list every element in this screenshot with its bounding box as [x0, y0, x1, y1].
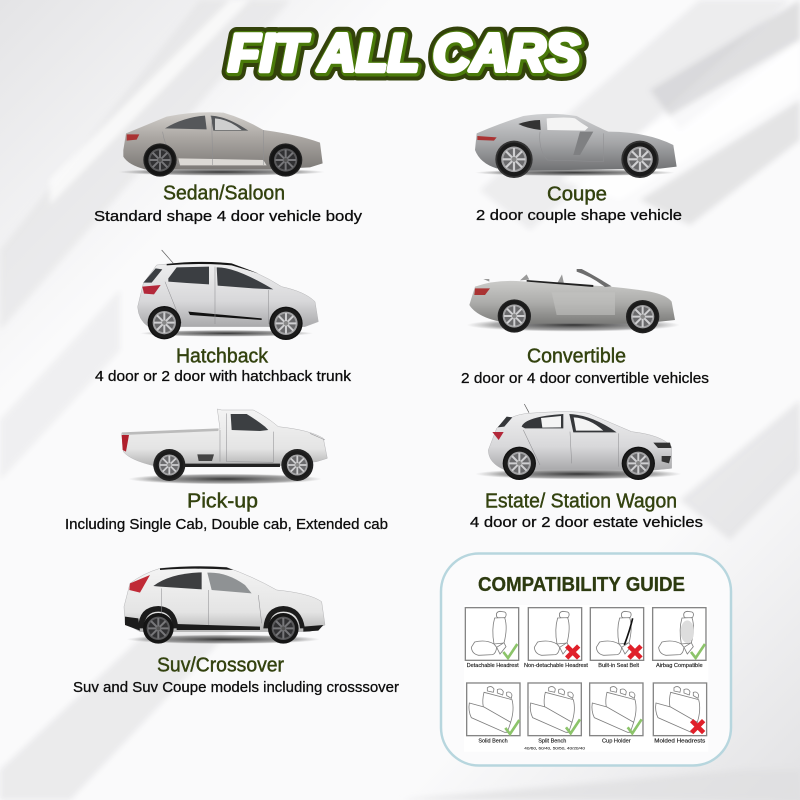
card: split bench: Split Bench [538, 739, 566, 745]
card: split bench [524, 683, 586, 750]
card: non-detachable headrest: Non-detachable Headrest [524, 663, 589, 669]
card: detachable headrest [465, 608, 519, 669]
title: FIT ALL CARS [228, 24, 580, 83]
card: airbag compatible [653, 608, 706, 669]
panel heading: COMPATIBILITY GUIDE [478, 574, 685, 596]
card: airbag compatible: Airbag Compatible [656, 663, 703, 669]
card: solid bench: Solid Bench [478, 739, 508, 745]
car: estate [475, 404, 682, 480]
card: cup holder: Cup Holder [602, 739, 631, 745]
card: molded headrests: Molded Headrests [654, 739, 706, 745]
card: detachable headrest: Detachable Headrest [467, 663, 519, 669]
heading: pick-up: Pick-up [187, 490, 258, 512]
card: built-in seat belt: Built-in Seat Belt [598, 663, 640, 669]
heading: hatchback: Hatchback [176, 346, 269, 368]
car: hatchback [138, 250, 318, 340]
heading: estate: Estate/ Station Wagon [485, 490, 677, 512]
text: coupe description: 2 door couple shape vehicle [476, 207, 682, 224]
car: suv [124, 566, 325, 644]
text: estate description: 4 door or 2 door estate vehicles [470, 514, 703, 531]
heading: suv: Suv/Crossover [157, 654, 284, 676]
text: hatchback description: 4 door or 2 door with hatchback trunk [95, 368, 352, 385]
car: sedan [118, 112, 325, 177]
panel: compatibility guide [441, 554, 731, 766]
heading: sedan: Sedan/Saloon [163, 182, 285, 204]
card: cup holder [590, 683, 643, 745]
text: suv description: Suv and Suv Coupe models including crosssover [73, 679, 399, 696]
card: non-detachable headrest [524, 608, 589, 669]
title: FIT ALL CARS [229, 25, 581, 84]
car: pickup [122, 409, 327, 484]
card: molded headrests [653, 683, 707, 745]
card: built-in seat belt [590, 608, 644, 669]
heading: convertible: Convertible [527, 346, 626, 368]
car: convertible [467, 269, 680, 333]
card: split bench: 40/60, 60/40, 50/50, 40/20/40 [524, 745, 586, 750]
seat chart [464, 605, 708, 752]
text: pick-up description: Including Single Cab, Double cab, Extended cab [65, 516, 388, 533]
title: FIT ALL CARS [229, 25, 581, 84]
card: solid bench [467, 683, 520, 745]
heading: coupe: Coupe [547, 184, 607, 206]
car: coupe [475, 114, 677, 178]
text: sedan description: Standard shape 4 door vehicle body [94, 208, 363, 225]
text: convertible description: 2 door or 4 door convertible vehicles [461, 370, 709, 387]
